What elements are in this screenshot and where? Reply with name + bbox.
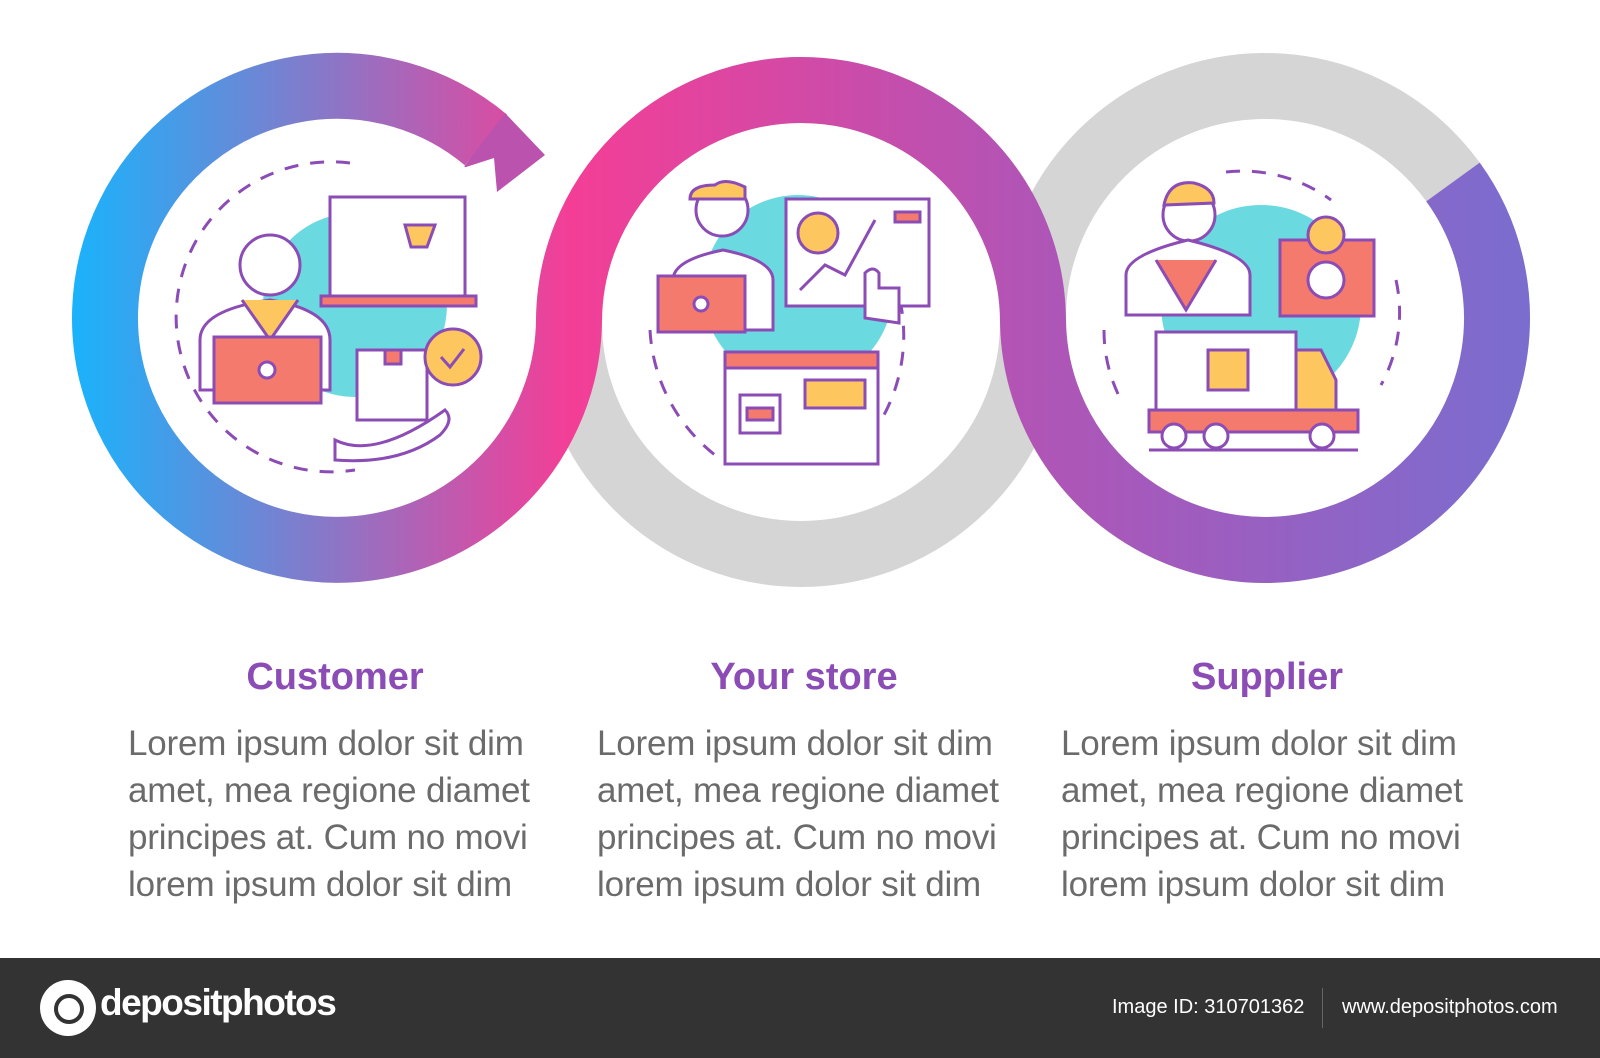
icon: your store xyxy=(650,181,929,464)
text: supplier: principes at. Cum no movi xyxy=(1061,818,1461,857)
image id: Image ID: 310701362 xyxy=(1112,996,1304,1018)
heading: Supplier: Supplier xyxy=(1191,656,1343,698)
text: your store: lorem ipsum dolor sit dim xyxy=(597,865,981,904)
arrow head xyxy=(463,113,545,192)
heading: Customer: Customer xyxy=(246,656,424,698)
icon: supplier xyxy=(1104,171,1400,450)
icon: customer xyxy=(176,162,481,472)
text: your store: amet, mea regione diamet xyxy=(597,771,999,810)
logo text: depositphotos xyxy=(100,982,335,1023)
text: customer: principes at. Cum no movi xyxy=(128,818,528,857)
text: your store: Lorem ipsum dolor sit dim xyxy=(597,724,993,763)
ribbon: S-shaped gradient path xyxy=(105,86,1497,550)
text: customer: Lorem ipsum dolor sit dim xyxy=(128,724,524,763)
icon: logo camera xyxy=(40,980,96,1036)
footer bar xyxy=(0,958,1600,1058)
text: supplier: lorem ipsum dolor sit dim xyxy=(1061,865,1445,904)
text: customer xyxy=(128,724,530,904)
text: your store xyxy=(597,724,999,904)
text: customer: amet, mea regione diamet xyxy=(128,771,530,810)
heading: Your store: Your store xyxy=(710,656,898,698)
text: supplier: amet, mea regione diamet xyxy=(1061,771,1463,810)
text: customer: lorem ipsum dolor sit dim xyxy=(128,865,512,904)
text: supplier: Lorem ipsum dolor sit dim xyxy=(1061,724,1457,763)
text: supplier xyxy=(1061,724,1463,904)
text: your store: principes at. Cum no movi xyxy=(597,818,997,857)
inner circles xyxy=(139,120,1463,520)
grey rings xyxy=(569,86,1497,554)
website: www.depositphotos.com xyxy=(1342,996,1558,1018)
